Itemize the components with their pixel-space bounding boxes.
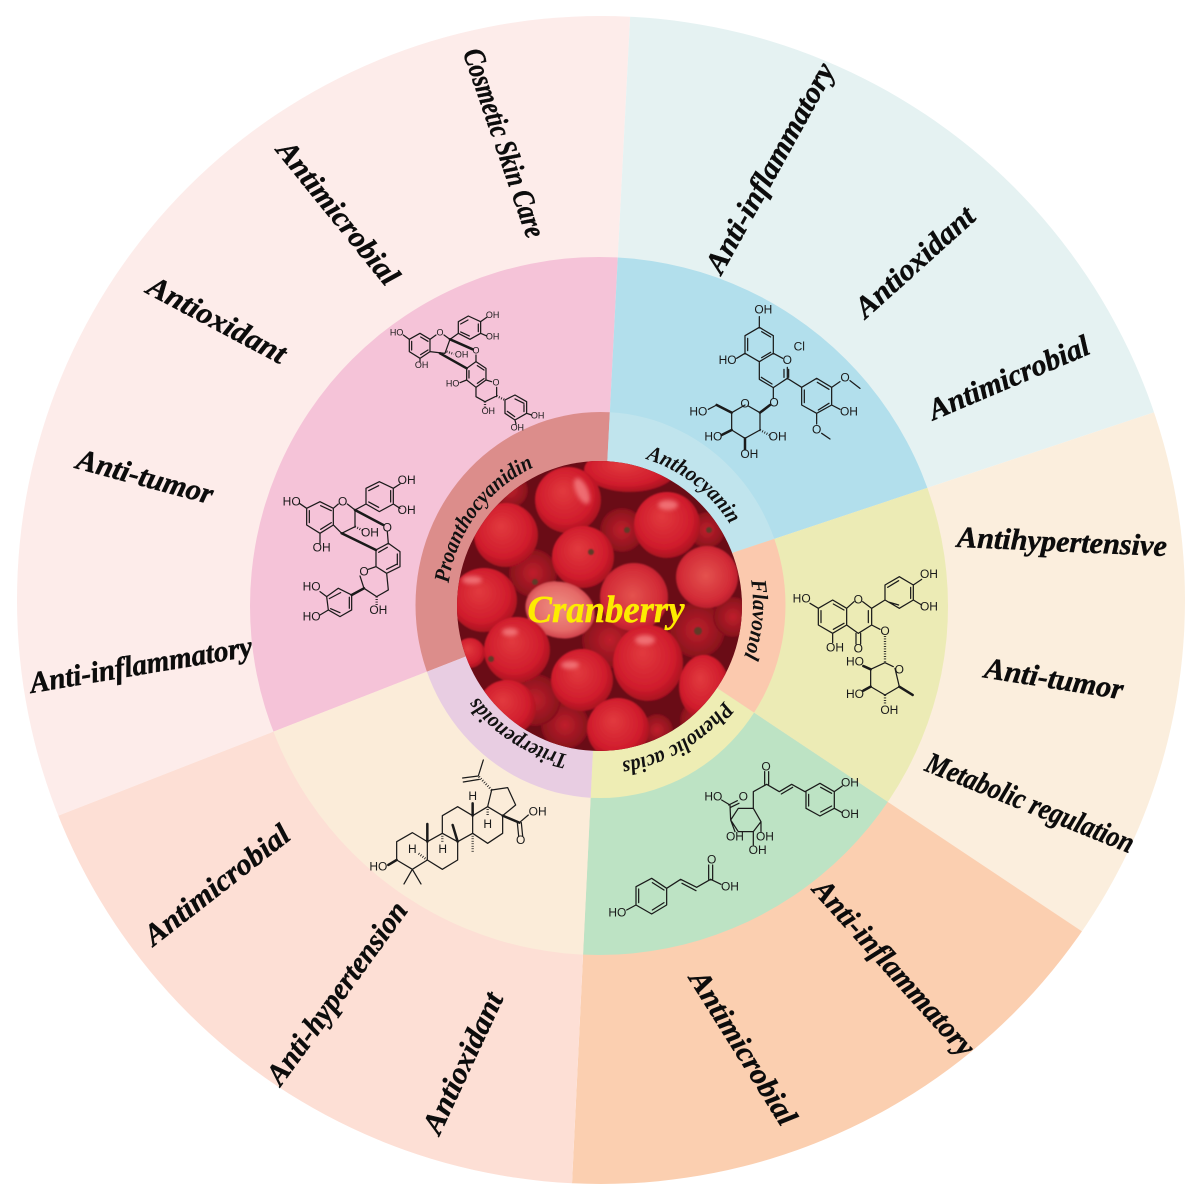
structure: procyanidin, upper: OH: [511, 422, 524, 432]
structure: procyanidin, upper: HO: [390, 327, 403, 337]
structure: procyanidin, lower: HO: [303, 610, 321, 624]
structure: anthocyanin: O: [783, 353, 792, 367]
structure: procyanidin, lower: O: [338, 495, 347, 509]
text block: flavonol activities: [920, 521, 1168, 860]
structure: procyanidin, lower: O: [359, 565, 369, 579]
structure: quercetin rhamnoside (flavonol): HO: [846, 655, 864, 669]
structure: quercetin rhamnoside (flavonol): HO: [846, 687, 864, 701]
structure: betulinic acid (triterpenoid): H: [438, 842, 447, 856]
structure: procyanidin, upper: O: [472, 346, 479, 356]
text block: triterpenoid activities: Antioxidant: [415, 986, 511, 1141]
structure: chlorogenic acid (phenolic acid): OH: [756, 830, 774, 844]
structure: procyanidin, upper: OH: [486, 332, 499, 342]
structure: anthocyanin: O: [840, 370, 850, 384]
label: Anthocyanin: Anthocyanin: [644, 448, 738, 524]
structure: quercetin rhamnoside (flavonol): O: [880, 624, 890, 638]
structure: procyanidin, lower: OH: [398, 473, 416, 487]
structure: procyanidin, lower: HO: [283, 495, 301, 509]
structure: anthocyanin: Cl: [794, 340, 805, 354]
label: Phenolic acids: Phenolic acids: [623, 701, 734, 776]
text block: proanthocyanidin activities: Antimicrobial: [269, 133, 407, 292]
structure: quercetin rhamnoside (flavonol): OH: [880, 703, 898, 717]
structure: procyanidin, lower: OH: [313, 541, 331, 555]
text block: phenolic acid activities: Antimicrobial: [681, 963, 804, 1132]
center photo: cranberries: [457, 461, 742, 751]
inner ring: compound class sectors: [416, 412, 786, 798]
structure: betulinic acid (triterpenoid): O: [516, 833, 525, 847]
text block: triterpenoid activities: Anti-hypertension: [258, 895, 414, 1092]
structure: chlorogenic acid (phenolic acid): HO: [608, 905, 626, 919]
text block: triterpenoid activities: [136, 817, 511, 1141]
label: Proanthocyanidin: Proanthocyanidin: [434, 458, 533, 584]
structure: anthocyanin: OH: [840, 405, 858, 419]
structure: quercetin rhamnoside (flavonol): O: [854, 641, 863, 655]
structure: procyanidin, upper: HO: [446, 378, 459, 388]
structure: procyanidin, upper: [390, 310, 544, 432]
text block: proanthocyanidin activities: [25, 44, 552, 700]
structure: anthocyanin: O: [769, 396, 779, 410]
structure: betulinic acid (triterpenoid): [369, 760, 547, 884]
structure: anthocyanin: [689, 302, 860, 461]
structure: procyanidin, lower: O: [383, 520, 392, 534]
structure: betulinic acid (triterpenoid): H: [468, 789, 477, 803]
structure: chlorogenic acid (phenolic acid): OH: [841, 775, 859, 789]
text block: proanthocyanidin activities: Antioxidant: [140, 269, 294, 371]
structure: chlorogenic acid (phenolic acid): HO: [704, 790, 722, 804]
structure: anthocyanin: O: [740, 396, 750, 410]
structure: betulinic acid (triterpenoid): H: [408, 842, 417, 856]
text block: triterpenoid activities: Antimicrobial: [136, 817, 297, 953]
structure: chlorogenic acid (phenolic acid): OH: [726, 830, 744, 844]
structure: anthocyanin: HO: [689, 405, 707, 419]
structure: chlorogenic acid (phenolic acid): O: [707, 852, 716, 866]
middle ring: compound structure sectors: [250, 257, 948, 955]
title: Cranberry: Cranberry: [528, 589, 685, 631]
text block: flavonol activities: Metabolic regulation: [920, 746, 1139, 860]
structure: procyanidin, lower: OH: [398, 503, 416, 517]
structure: anthocyanin: OH: [769, 430, 787, 444]
structure: quercetin rhamnoside (flavonol): O: [895, 662, 904, 676]
text block: anthocyanin activities: Anti-inflammatory: [698, 57, 842, 281]
structure: procyanidin, upper: OH: [482, 406, 495, 416]
structure: chlorogenic acid (phenolic acid): OH: [841, 807, 859, 821]
label: Flavonol: Flavonol: [744, 580, 768, 662]
text block: phenolic acid activities: Anti-inflammatory: [805, 872, 982, 1064]
structure: procyanidin, upper: OH: [455, 349, 468, 359]
structure: anthocyanin: HO: [719, 353, 737, 367]
structure: procyanidin, upper: OH: [486, 310, 499, 320]
text block: phenolic acid activities: [681, 872, 982, 1132]
structure: chlorogenic acid (phenolic acid): [608, 760, 859, 919]
text block: proanthocyanidin activities: Anti-tumor: [71, 442, 217, 511]
structure: quercetin rhamnoside (flavonol): HO: [793, 591, 811, 605]
structure: betulinic acid (triterpenoid): OH: [529, 805, 547, 819]
structure: anthocyanin: OH: [740, 447, 758, 461]
text block: anthocyanin activities: Antioxidant: [847, 198, 983, 326]
text block: proanthocyanidin activities: Cosmetic Skin Care: [456, 44, 552, 242]
structure: chlorogenic acid (phenolic acid): O: [739, 790, 748, 804]
structure: quercetin rhamnoside (flavonol): OH: [826, 640, 844, 654]
text block: proanthocyanidin activities: Anti-inflammatory: [25, 630, 255, 700]
structure: quercetin rhamnoside (flavonol): O: [854, 592, 863, 606]
structure: procyanidin, upper: O: [436, 328, 443, 338]
structure: procyanidin, upper: OH: [531, 411, 544, 421]
text block: anthocyanin activities: [698, 57, 1095, 428]
label: Triterpenoids: Triterpenoids: [470, 698, 567, 768]
structure: anthocyanin: O: [812, 422, 821, 436]
text block: anthocyanin activities: Antimicrobial: [922, 329, 1095, 428]
structure: procyanidin, lower: HO: [303, 580, 321, 594]
structure: procyanidin, lower: OH: [361, 525, 379, 539]
structure: procyanidin, lower: OH: [369, 603, 387, 617]
structure: chlorogenic acid (phenolic acid): O: [761, 760, 771, 774]
structure: procyanidin, lower: [283, 473, 416, 624]
structure: procyanidin, upper: O: [492, 378, 499, 388]
structure: anthocyanin: OH: [754, 302, 772, 316]
structure: anthocyanin: HO: [704, 430, 722, 444]
text block: flavonol activities: Anti-tumor: [980, 651, 1126, 706]
structure: chlorogenic acid (phenolic acid): OH: [749, 843, 767, 857]
structure: procyanidin, upper: OH: [415, 360, 428, 370]
structure: quercetin rhamnoside (flavonol): [793, 567, 938, 717]
structure: betulinic acid (triterpenoid): H: [483, 817, 492, 831]
structure: betulinic acid (triterpenoid): HO: [369, 860, 387, 874]
structure: quercetin rhamnoside (flavonol): OH: [920, 567, 938, 581]
structure: chlorogenic acid (phenolic acid): OH: [721, 880, 739, 894]
structure: quercetin rhamnoside (flavonol): OH: [920, 600, 938, 614]
text block: flavonol activities: Antihypertensive: [954, 521, 1168, 563]
